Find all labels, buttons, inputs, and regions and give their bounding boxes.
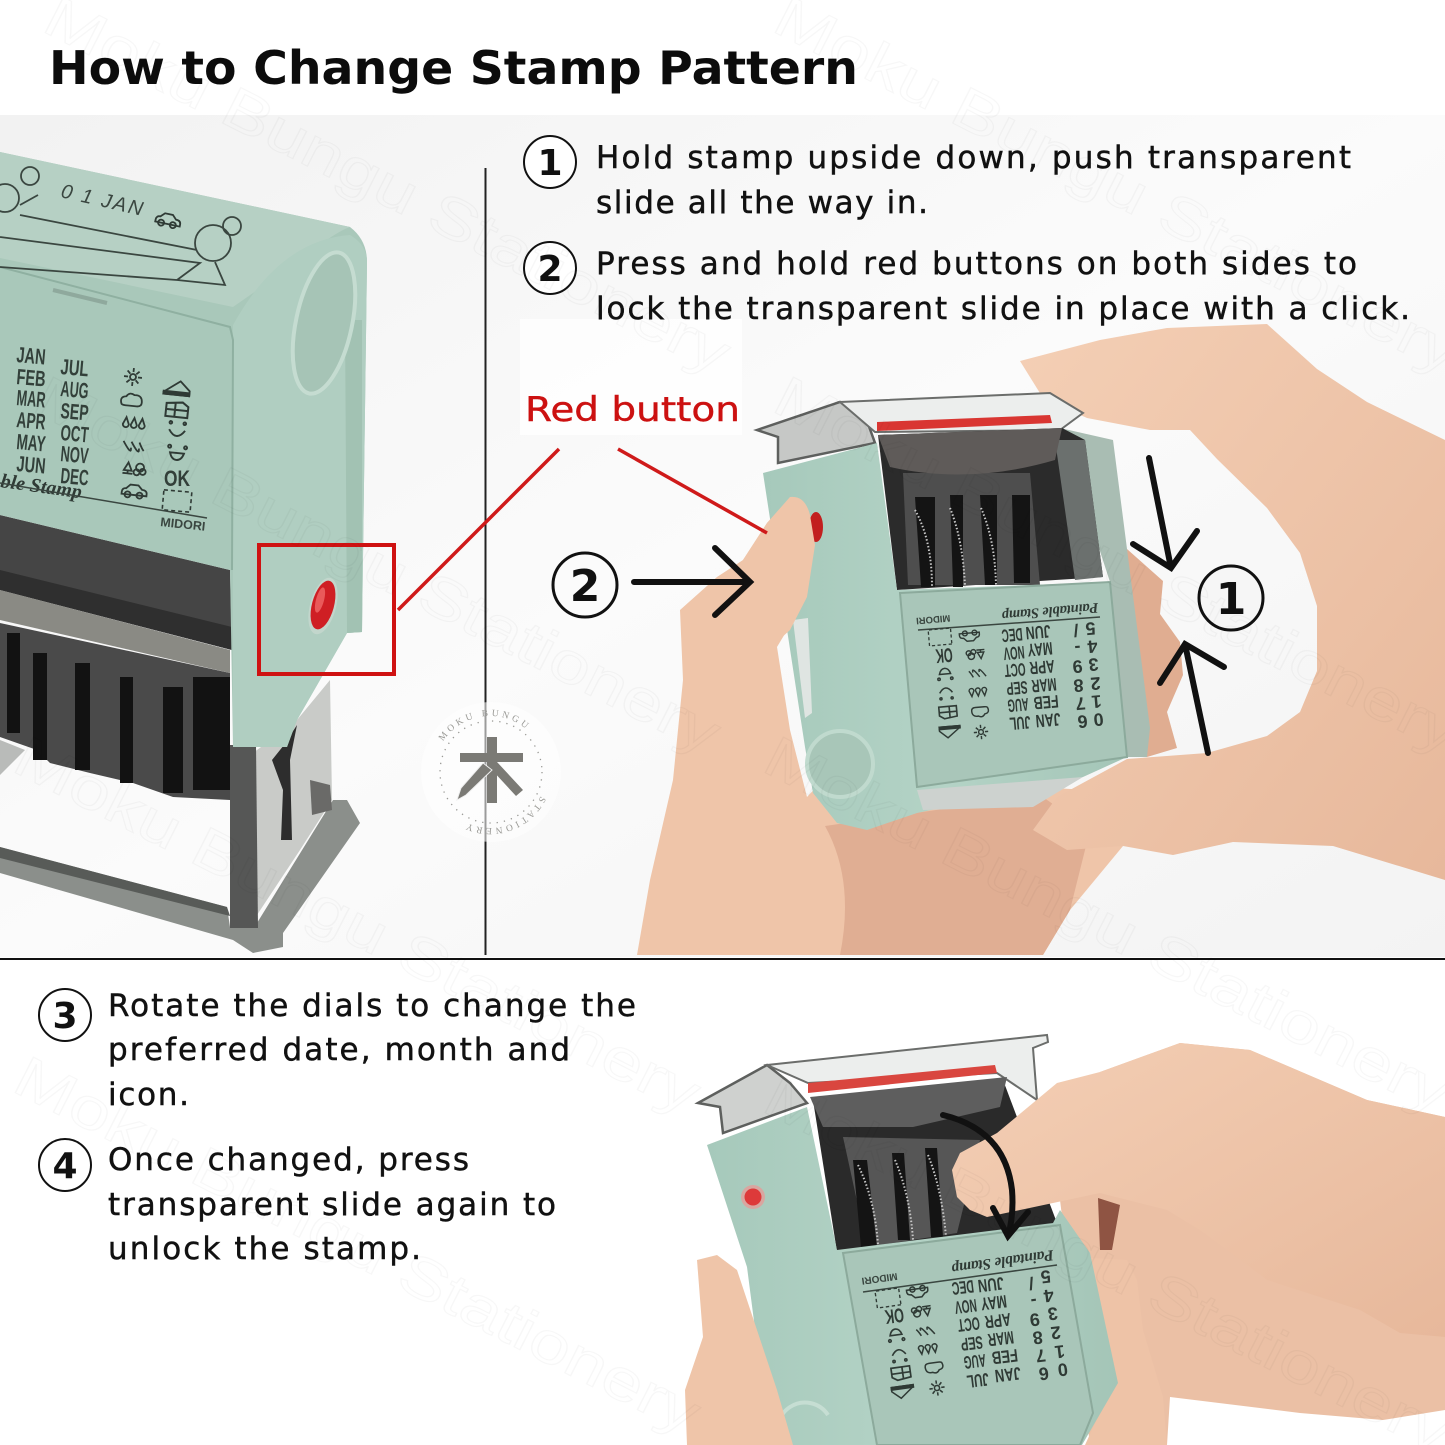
upside-down print: 0 (1057, 1359, 1069, 1380)
OK label: OK (164, 466, 190, 491)
month table: JUN (16, 451, 47, 479)
photo: stamp side view: 0 1 JAN (59, 180, 147, 221)
bottom strip (917, 777, 1083, 810)
top glass strip (767, 1035, 1048, 1100)
mint body (763, 443, 1127, 830)
caption and rule: MIDORI (916, 612, 951, 626)
red ink pad (877, 415, 1052, 431)
upside-down print: 4 (1043, 1285, 1055, 1306)
photo: hands holding stamp (637, 324, 1445, 955)
upside-down print: SEP (1006, 677, 1028, 699)
upside-down print (883, 1266, 1069, 1392)
red button (303, 575, 343, 637)
upper photo panel (0, 115, 1445, 957)
index finger and upper hand (952, 1043, 1445, 1337)
callout label: red button: Red button (525, 390, 740, 430)
red ink pad (808, 1065, 997, 1093)
instruction step 1: slide all the way in. (596, 185, 929, 221)
instruction step 4 (39, 1139, 557, 1267)
section divider (0, 958, 1445, 960)
month table: MAR (16, 385, 47, 413)
upside-down print: 5 (1040, 1266, 1052, 1287)
upside-down print: - (1074, 638, 1081, 658)
instruction step 4: 4 (52, 1146, 78, 1187)
fingers behind stamp (1127, 549, 1183, 757)
photo watermark: Moku Bungu Stationery (764, 364, 1445, 767)
upside-down print: APR (984, 1309, 1012, 1332)
upside-down print: 1 (1091, 691, 1102, 712)
photo: stamp side view (0, 152, 367, 953)
upside-down print: 4 (1087, 636, 1098, 657)
interior (878, 428, 1103, 590)
top glass strip (840, 393, 1083, 432)
instruction step 3 (39, 988, 637, 1113)
photo watermark: Moku Bungu Stationery (754, 724, 1445, 1127)
upside-down print: 0 (1093, 709, 1104, 730)
mint body (0, 152, 367, 747)
month table (16, 342, 90, 490)
upside-down print: NOV (954, 1295, 978, 1318)
roller end cap (282, 247, 366, 399)
photo watermark: Moku Bungu Stationery (24, 364, 731, 767)
upside-down print: JAN (994, 1363, 1022, 1386)
caption and rule (861, 1246, 1057, 1292)
palm (1060, 1043, 1445, 1445)
right body strip (1060, 428, 1150, 757)
caption and rule: MIDORI (861, 1270, 898, 1286)
upside-down print: 3 (1088, 654, 1099, 675)
left hand (637, 497, 1123, 955)
upside-down print: OCT (1004, 659, 1026, 681)
upside-down print: SEP (960, 1332, 984, 1355)
upside-down print: FEB (991, 1345, 1019, 1368)
upside-down print: DEC (1001, 624, 1023, 646)
photo watermark: Moku Bungu Stationery (754, 1064, 1445, 1445)
upside-down print: / (1028, 1273, 1035, 1293)
left thumb (685, 1255, 793, 1445)
stamp frame corner glass (757, 402, 875, 463)
roller end cap (807, 731, 873, 797)
dial springs (858, 1155, 946, 1245)
stamp icons (875, 1285, 946, 1399)
stamp caption: ble Stamp (0, 470, 83, 503)
caption and rule: Paintable Stamp (1001, 599, 1099, 623)
instruction step 2: lock the transparent slide in place with a click. (596, 291, 1411, 327)
caption and rule: Paintable Stamp (950, 1246, 1055, 1277)
upside-down print: 8 (1032, 1327, 1044, 1348)
grey strip (0, 590, 230, 673)
upside-down print: 9 (1072, 656, 1083, 677)
red button (741, 1185, 765, 1209)
upside-down print: / (1073, 620, 1079, 640)
upside-down print: - (1030, 1291, 1038, 1312)
upside-down print: MAY (980, 1291, 1008, 1314)
instruction step 1: Hold stamp upside down, push transparent (596, 140, 1352, 176)
upside-down print: 2 (1090, 673, 1101, 694)
upside-down print: 3 (1047, 1303, 1059, 1324)
instruction step 4: unlock the stamp. (108, 1231, 422, 1267)
caption and rule (916, 599, 1100, 630)
thumb (717, 497, 815, 648)
stamp caption (0, 470, 207, 534)
upside-down print (934, 618, 1104, 734)
photo annotation: arrow 2: 2 (570, 561, 600, 612)
vertical divider (484, 168, 486, 955)
instruction step 4: transparent slide again to (108, 1187, 557, 1223)
upside-down print: NOV (1003, 642, 1025, 664)
dark ribbed band (0, 515, 232, 650)
interior (813, 1080, 1057, 1252)
upside-down print: APR (1029, 656, 1055, 678)
upside-down print: 7 (1035, 1345, 1047, 1366)
palm shadow (825, 795, 1090, 955)
right hand (1020, 324, 1445, 880)
upside-down print: OCT (957, 1313, 981, 1336)
roller end cap (778, 1403, 828, 1445)
instruction step 1: 1 (537, 143, 563, 184)
finger gap shadow (1098, 1198, 1120, 1250)
stamp caption: MIDORI (160, 515, 206, 534)
upside-down print: 5 (1085, 618, 1096, 639)
month table: MAY (16, 429, 47, 457)
month table: JAN (16, 342, 47, 370)
upside-down print: 6 (1077, 711, 1088, 732)
upside-down print: 6 (1038, 1363, 1050, 1384)
side slit (793, 618, 812, 718)
upside-down print: JUN (977, 1273, 1005, 1296)
photo annotation: arrows 1 (1133, 458, 1263, 753)
rotation arrow (943, 1115, 1028, 1236)
upside-down print: 7 (1075, 693, 1086, 714)
logo watermark: MOKU BUNGU (438, 710, 530, 742)
date dials (0, 623, 230, 800)
printed stamp top (0, 167, 241, 285)
upside-down print: FEB (1033, 691, 1059, 713)
instruction step 3: icon. (108, 1077, 190, 1113)
instruction step 3: Rotate the dials to change the (108, 988, 637, 1024)
frame corner glass (698, 1065, 807, 1133)
month table: AUG (60, 376, 90, 403)
photo annotation: arrows 1: 1 (1216, 574, 1246, 625)
photo: rotating the dials (685, 1035, 1445, 1445)
upside-down print: MAY (1027, 638, 1053, 660)
front panel (900, 582, 1127, 787)
month table: JUL (60, 354, 90, 381)
upside-down print: MAR (987, 1327, 1015, 1350)
transparent stamp frame (253, 680, 332, 915)
month table: FEB (16, 364, 47, 392)
stamp base foot (0, 800, 360, 953)
instruction step 2: 2 (537, 249, 563, 290)
upside-down print: 9 (1029, 1309, 1041, 1330)
month table: APR (16, 407, 47, 435)
mint body (707, 1107, 1118, 1445)
logo watermark (438, 702, 546, 842)
month table: OCT (60, 420, 90, 447)
upside-down print: OK (883, 1303, 905, 1327)
upside-down print: AUG (963, 1350, 987, 1373)
upside-down print: 2 (1050, 1322, 1062, 1343)
upside-down print: OK (934, 643, 953, 666)
upside-down print: JUL (1009, 712, 1031, 734)
instruction step 3: preferred date, month and (108, 1032, 571, 1068)
weather and mood icons (121, 367, 192, 512)
stamp icons (928, 628, 989, 740)
instruction step 3: 3 (52, 996, 78, 1037)
upside-down print: JUL (966, 1369, 990, 1392)
logo watermark: STATIONERY (466, 796, 546, 834)
month table: NOV (60, 441, 90, 468)
callout lines to red button (398, 449, 767, 610)
front panel (843, 1225, 1093, 1445)
red button on stamp (809, 512, 823, 542)
callout label: red button (520, 319, 742, 435)
photo watermark: Moku Bungu Stationery (4, 724, 711, 1127)
instruction step 4: Once changed, press (108, 1142, 470, 1178)
upside-down print: 1 (1054, 1341, 1066, 1362)
instruction step 1 (524, 136, 1352, 221)
photo watermark: Moku Bungu Stationery (4, 1044, 711, 1445)
month table: DEC (60, 463, 90, 490)
photo annotation: arrow 2 (553, 548, 750, 617)
title: How to Change Stamp Pattern (49, 41, 858, 95)
upside-down print: DEC (951, 1276, 975, 1299)
upside-down print: JUN (1025, 621, 1051, 643)
red highlight box (259, 545, 394, 674)
instruction step 2: Press and hold red buttons on both sides to (596, 246, 1358, 282)
upside-down print: JAN (1035, 709, 1061, 731)
month table: SEP (60, 398, 90, 425)
dial springs (915, 508, 996, 587)
upside-down print: AUG (1007, 694, 1029, 716)
instruction step 2 (524, 242, 1411, 327)
upside-down print: MAR (1031, 674, 1057, 696)
upside-down print: 8 (1073, 675, 1084, 696)
lower finger (1075, 1257, 1167, 1445)
